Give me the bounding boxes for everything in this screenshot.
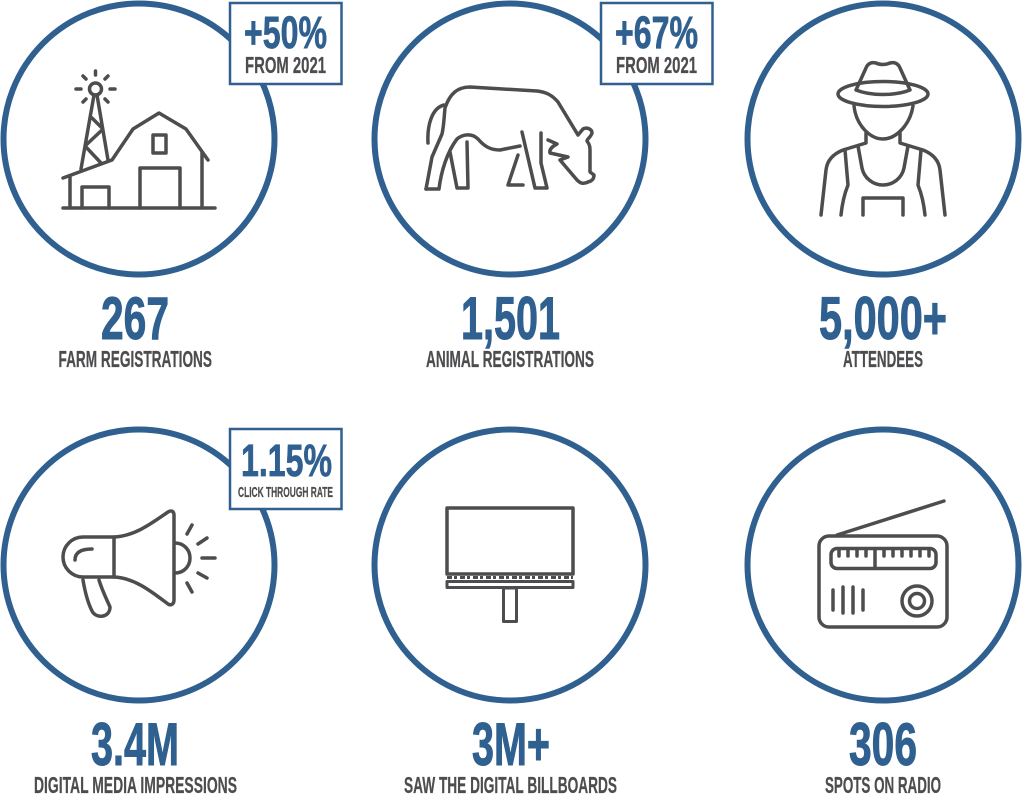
stat: 1,501: 1,501	[461, 285, 560, 352]
badge: +67%: +67%	[615, 7, 698, 58]
stat: 267: 267	[101, 285, 169, 352]
stat: 5,000+: 5,000+	[819, 285, 947, 352]
circle: animal	[374, 4, 646, 274]
panel: spots on radio	[748, 430, 1018, 798]
stat: 306: 306	[849, 711, 917, 778]
stat: 3.4M: 3.4M	[91, 711, 179, 778]
icon: cow	[426, 87, 594, 189]
badge: +67%: FROM 2021	[616, 52, 697, 78]
panel: farm registrations	[4, 3, 342, 372]
panel: digital media impressions	[4, 429, 342, 798]
icon: farmer	[821, 63, 945, 215]
icon: barn and windmill	[63, 71, 215, 208]
panel: digital billboards	[374, 430, 646, 798]
panel: animal registrations	[374, 3, 712, 372]
label: spots on radio: SPOTS ON RADIO	[825, 772, 941, 798]
badge: +67%	[601, 3, 712, 84]
badge: 1.15%: 1.15%	[241, 435, 332, 486]
badge: +50%	[230, 3, 342, 84]
panel: attendees	[748, 4, 1018, 372]
label: attendees: ATTENDEES	[843, 346, 923, 372]
circle: radio	[748, 430, 1018, 700]
circle: attendees	[748, 4, 1018, 274]
badge: +50%: +50%	[244, 7, 327, 58]
circle: digital media	[4, 430, 274, 700]
icon: billboard	[447, 508, 573, 622]
stat: 3M+: 3M+	[472, 711, 550, 778]
circle: billboards	[374, 430, 646, 700]
icon: megaphone	[63, 511, 215, 616]
label: farm registrations: FARM REGISTRATIONS	[58, 346, 212, 372]
badge: +50%: FROM 2021	[245, 52, 326, 78]
label: animal registrations: ANIMAL REGISTRATIONS	[426, 346, 594, 372]
badge: 1.15%	[230, 429, 342, 509]
label: saw the digital billboards: SAW THE DIGITAL BILLBOARDS	[404, 772, 617, 798]
circle: farm	[4, 4, 274, 274]
icon: radio	[819, 501, 947, 627]
label: digital media impressions: DIGITAL MEDIA IMPRESSIONS	[34, 772, 237, 798]
badge: 1.15%: CLICK THROUGH RATE	[238, 484, 333, 501]
